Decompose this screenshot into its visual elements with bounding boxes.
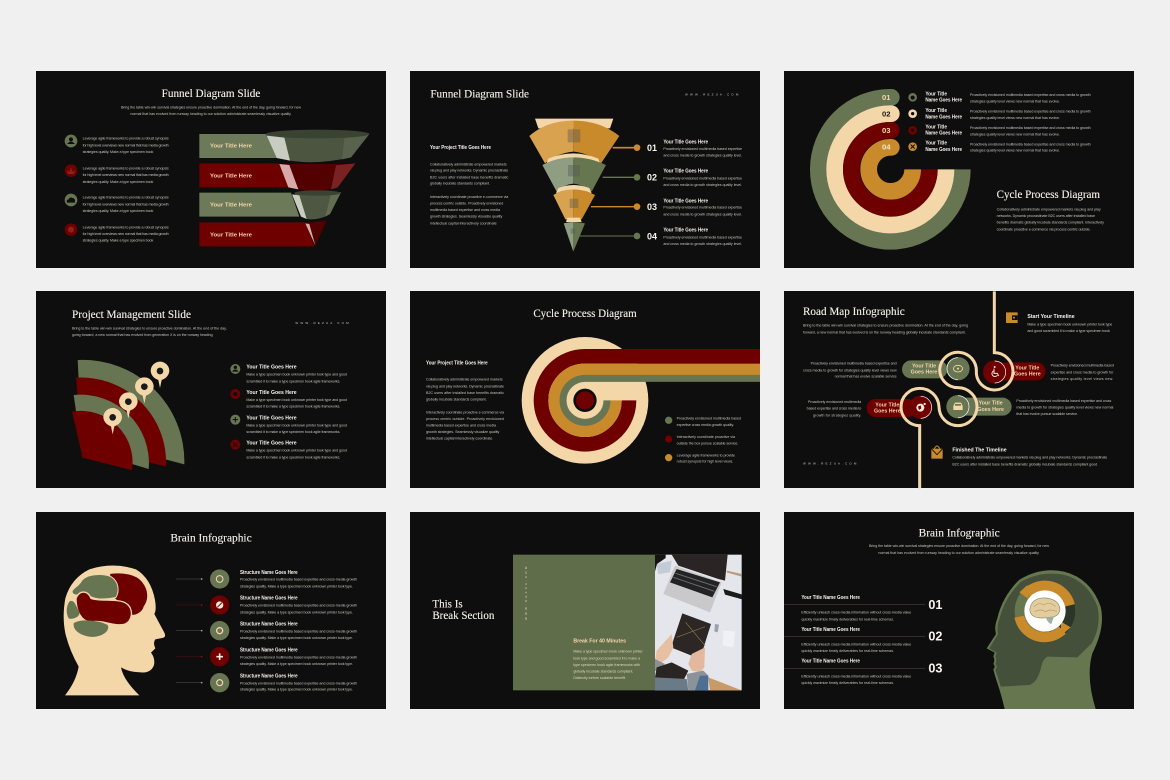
left text: process centric outside. Proactively envisioned [430, 202, 503, 206]
row 3 text: Your Title [925, 125, 947, 131]
left text: intellectual capital interactively coordinate [430, 221, 497, 225]
text block 4: for high level overviews new normal that has media growth [83, 232, 169, 236]
icon: star [65, 164, 77, 177]
project heading: Your Project Title Goes Here [426, 360, 488, 366]
structure row 5: Proactively envisioned multimedia based expertise and cross-media growth [240, 681, 357, 685]
head silhouette with brain [64, 565, 165, 695]
label 02: 02 [647, 173, 657, 183]
text block 1: strategies quality. Make a type specimen book [83, 150, 154, 154]
structure row 3: Structure Name Goes Here [240, 622, 298, 628]
text: left lower: growth for strategies quality. [813, 414, 861, 418]
label 01: Proactively envisioned multimedia based expertise [663, 147, 742, 151]
intro text [121, 106, 301, 116]
start timeline text: Start Your Timeline [1027, 314, 1075, 320]
title: Cycle Process Diagram [533, 307, 637, 320]
title: Brain Infographic [170, 531, 252, 544]
text: right lower: media to growth for strategies quality level views new normal [1016, 405, 1114, 409]
funnel tier 4 [199, 221, 327, 246]
item 03: Your Title Name Goes Here [801, 659, 860, 665]
left text [426, 378, 505, 441]
item 2 [230, 389, 347, 409]
card heading: Break For 40 Minutes [573, 639, 626, 645]
description: Collaboratively administrate empowered markets via plug and play [997, 208, 1101, 212]
legend item 2: Interactively coordinate proactive via [677, 435, 736, 439]
structure row 1: strategies quality. Make a type specimen book unknown printer took type. [240, 584, 353, 588]
item 3: Make a type specimen book unknown printer took type and good [246, 424, 347, 428]
structure row 5: Structure Name Goes Here [240, 673, 298, 679]
item 02: Your Title Name Goes Here [801, 627, 860, 633]
start timeline text: Make a type specimen book unknown printer took type [1027, 322, 1112, 326]
item 01: quickly maximize timely deliverables for real-time schemas. [801, 617, 894, 621]
connector 04 [579, 233, 640, 239]
label 02 [647, 169, 742, 187]
item 1 [230, 364, 347, 383]
title: Brain Infographic [919, 526, 1000, 539]
pill label: left bottom: Your Title [875, 402, 899, 408]
funnel tier 2: Your Title Here [210, 173, 252, 179]
card text: took type and good scrambled it to make a [573, 656, 641, 660]
description: networks. Dynamic procrastinate B2C users after installed base [997, 214, 1095, 218]
finished timeline text [952, 447, 1107, 466]
pill label: left top: Your Title [912, 364, 936, 370]
swirl diagram [522, 337, 760, 464]
connector 01 [613, 144, 640, 151]
break heading: Break Section [432, 609, 494, 622]
item 2: Make a type specimen book unknown printer took type and good [246, 398, 347, 402]
row 4 text: Name Goes Here [925, 147, 962, 153]
break heading [432, 598, 494, 622]
structure row 2: strategies quality. Make a type specimen book unknown printer took type. [240, 610, 353, 614]
label 04: Proactively envisioned multimedia based expertise [663, 235, 742, 239]
row 4 text [925, 141, 1091, 153]
intro text [869, 544, 1049, 555]
panel: cycle process stripes slide [410, 291, 760, 488]
text: right upper: Proactively envisioned multimedia based [1051, 364, 1114, 368]
label 03: Proactively envisioned multimedia based expertise [663, 206, 742, 210]
panel: brain infographic slide [36, 512, 386, 709]
road line [901, 291, 1013, 488]
finished timeline text: Collaboratively administrate empowered markets via plug and play networks. Dynamic procrastinate [952, 456, 1107, 460]
left text: Interactively coordinate proactive e-commerce via [430, 195, 509, 199]
label 04 [647, 228, 742, 246]
structure row 4 [176, 647, 357, 666]
card text: Distinctly before scalable benefit. [573, 676, 626, 680]
legend item 3 [665, 453, 735, 464]
icon: person [65, 135, 77, 147]
head silhouette [987, 570, 1102, 709]
row 2 text [925, 108, 1091, 120]
intro text: going forward, a new normal that has evolved from generation X is on the runway heading [72, 333, 213, 337]
left text: via plug and play networks. Dynamic procrastinate [430, 169, 508, 173]
left text: B2C users after installed base benefits dramatic [430, 175, 509, 179]
item 02 [784, 627, 942, 653]
break heading: This Is [432, 598, 463, 611]
label 02: Your Title Goes Here [663, 169, 708, 175]
connector 03 [591, 203, 640, 210]
legend item 1: expertise cross media growth quality. [677, 423, 734, 427]
structure row 2: Structure Name Goes Here [240, 596, 298, 602]
text: right upper: strategies quality level views new. [1051, 377, 1113, 381]
item 02: Efficiently unleash cross-media information without cross-media value [801, 642, 911, 646]
row 3 text: strategies quality level views new normal that has evolve. [970, 133, 1060, 137]
card text: Make a type specimen book unknown printer [573, 650, 643, 654]
legend item 3: Leverage agile frameworks to provide [677, 453, 735, 457]
label 04: and cross media to growth strategies quality level. [663, 242, 742, 246]
left text: via plug and play networks. Dynamic procrastinate [426, 384, 504, 388]
text block 3: Leverage agile frameworks to provide a robust synopsis [83, 196, 169, 200]
item 1: Your Title Goes Here [246, 365, 297, 371]
row 3 text: Name Goes Here [925, 131, 962, 137]
pill label: left top: Goes Here [911, 370, 937, 376]
text block 4: strategies quality. Make a type specimen book [83, 239, 154, 243]
label 01: 01 [647, 143, 657, 153]
funnel tier 1 [199, 130, 369, 162]
label 03: Your Title Goes Here [663, 198, 708, 204]
structure row 2: Proactively envisioned multimedia based expertise and cross-media growth [240, 604, 357, 608]
structure row 3: strategies quality. Make a type specimen book unknown printer took type. [240, 636, 353, 640]
row 2 text: Name Goes Here [925, 114, 962, 120]
funnel tier 2 [199, 163, 355, 191]
row 1 text: strategies quality level views new normal that has evolve. [970, 99, 1060, 103]
structure row 4: strategies quality. Make a type specimen book unknown printer took type. [240, 662, 353, 666]
intro text: forward, a new normal that has evolved is on the runway heading globally incubate standards compliant. [803, 330, 966, 334]
text: right upper: expertise and cross media to growth for [1051, 370, 1114, 374]
item 01: Efficiently unleash cross-media information without cross-media value [801, 611, 911, 615]
node: red wheelchair [983, 360, 1006, 384]
legend item 2 [665, 435, 738, 445]
funnel tier 3 [199, 190, 341, 219]
row 1 text: Proactively envisioned multimedia based expertise and cross media to growth [970, 93, 1091, 97]
node: green car [946, 395, 970, 418]
map pins [103, 362, 169, 434]
intro text: normal that has evolved from runway heading to our solution administrate seamlessly visualize quality [130, 112, 291, 116]
green card [513, 555, 655, 690]
cycle and brain icon [1015, 581, 1075, 641]
item 03: 03 [928, 662, 942, 676]
pill label: right top: Goes Here [1014, 372, 1041, 378]
funnel tier 3: Your Title Here [210, 203, 252, 209]
text block 2: Leverage agile frameworks to provide a robust synopsis [83, 167, 169, 171]
finished timeline text: B2C users after installed base benefits dramatic globally incubate standards compliant good [952, 462, 1097, 466]
pill label: right bottom [977, 401, 1004, 413]
structure row 1 [176, 569, 357, 589]
icon: wallet [1006, 312, 1018, 323]
intro text [72, 327, 227, 337]
legend item 1 [665, 416, 741, 427]
node: green eye [946, 357, 970, 380]
vertical website label: W W W . R E Z U A . C O M [524, 566, 528, 620]
title: Funnel Diagram Slide [430, 88, 529, 101]
intro text: Bring to the table win-win survival strategies to ensure proactive domination. At the end of the day, going [803, 323, 968, 327]
text: right lower: Proactively envisioned multimedia based expertise and cross [1016, 399, 1112, 403]
label 02: Proactively envisioned multimedia based expertise [663, 176, 742, 180]
item 02: 02 [928, 630, 942, 644]
left text: Interactively coordinate proactive e-commerce via [426, 411, 505, 415]
heading: Cycle Process Diagram [997, 188, 1100, 201]
text: left upper: Proactively envisioned multimedia based expertise and [811, 361, 897, 365]
icon: cloud [65, 194, 77, 206]
fan chart [72, 360, 184, 470]
pill label: left bottom: Goes Here [874, 408, 901, 414]
left text: Collaboratively administrate empowered markets [430, 162, 507, 166]
funnel tier 4: Your Title Here [210, 232, 252, 238]
item 2: scrambled it to make a type specimen book agile frameworks. [246, 405, 340, 409]
left text: globally incubate standards compliant. [426, 397, 487, 401]
item 2: Your Title Goes Here [246, 390, 297, 396]
structure row 3 [176, 621, 357, 640]
legend item 3: robust synopsis for high level views. [677, 460, 733, 464]
label 03: and cross media to growth strategies quality level. [663, 212, 742, 216]
item 03: Efficiently unleash cross-media information without cross-media value [801, 674, 911, 678]
structure row 1: Structure Name Goes Here [240, 570, 298, 576]
left text [430, 162, 509, 225]
panel: funnel diagram slide 2 [410, 71, 760, 268]
title: Funnel Diagram Slide [162, 87, 260, 100]
photo: laptop and notebook on desk [655, 555, 742, 690]
row 4 text: Proactively envisioned multimedia based expertise and cross media to growth [970, 142, 1091, 146]
left text: multimedia based expertise and cross media [430, 208, 501, 212]
left text: growth strategies. Seamlessly visualize quality [430, 215, 503, 219]
structure row 5 [176, 673, 357, 692]
panel: break section slide [410, 512, 760, 709]
item 4: scrambled it to make a type specimen book agile frameworks. [246, 455, 340, 459]
text block 4: Leverage agile frameworks to provide a robust synopsis [83, 225, 169, 229]
project heading: Your Project Title Goes Here [430, 145, 491, 151]
item 02: quickly maximize timely deliverables for real-time schemas. [801, 649, 894, 653]
description: coordinate proactive e-commerce via process centric outside. [997, 227, 1091, 231]
funnel tier 1: Your Title Here [210, 144, 252, 150]
text block 3 [83, 196, 169, 213]
step numbers [882, 93, 891, 151]
text: right lower: that has evolve pursue scalable service. [1016, 412, 1078, 416]
funnel graphic [529, 119, 619, 252]
label 01 [647, 139, 742, 157]
step numbers: 02 [882, 110, 891, 119]
icon: mail bag [931, 446, 943, 459]
text: left lower: based expertise and cross media to [807, 407, 861, 411]
row 3 text [925, 125, 1091, 137]
panel: road map slide [784, 291, 1134, 488]
text: right upper [1051, 364, 1114, 381]
row 1 text: Your Title [925, 92, 947, 98]
left text: Collaboratively administrate empowered markets [426, 378, 503, 382]
item 01: Your Title Name Goes Here [801, 595, 860, 601]
structure row 4: Structure Name Goes Here [240, 648, 298, 654]
pill label: left bottom [874, 402, 901, 414]
panel: cycle process spiral slide [784, 71, 1134, 268]
left text: B2C users after installed base benefits dramatic [426, 391, 504, 395]
structure row 5: strategies quality. Make a type specimen book unknown printer took type. [240, 688, 353, 692]
text: left lower [807, 400, 862, 418]
icon: badge [65, 223, 77, 236]
structure row 4: Proactively envisioned multimedia based expertise and cross-media growth [240, 656, 357, 660]
text: left upper: normal that has evolve scalable service [835, 374, 897, 378]
item 03 [784, 659, 942, 685]
row 2 text: Proactively envisioned multimedia based expertise and cross media to growth [970, 109, 1091, 113]
pill label: left top [911, 364, 937, 376]
website label: W W W . R E Z U A . C O M [295, 321, 349, 325]
item 3 [230, 415, 347, 434]
intro text: normal that has evolved from runway heading to our solution administrate seamlessly visualize quality [878, 551, 1039, 555]
text: left upper [803, 361, 897, 378]
text block 3: for high level overviews new normal that has media growth [83, 202, 169, 206]
left text: growth strategies. Seamlessly visualize quality [426, 430, 500, 434]
text block 2: for high level overviews new normal that has media growth [83, 173, 169, 177]
structure row 3: Proactively envisioned multimedia based expertise and cross-media growth [240, 630, 357, 634]
row 3 text: Proactively envisioned multimedia based expertise and cross media to growth [970, 126, 1091, 130]
row 4 text: Your Title [925, 141, 947, 147]
text block 2: strategies quality. Make a type specimen book [83, 180, 154, 184]
item 1: scrambled it to make a type specimen book agile frameworks. [246, 379, 340, 383]
connector 02 [603, 174, 640, 181]
item 1: Make a type specimen book unknown printer took type and good [246, 373, 347, 377]
intro text: Bring to the table win-win survival strategies to ensure proactive domination. At the end of the day, [72, 327, 227, 331]
row 2 text: Your Title [925, 108, 947, 114]
label 04: 04 [647, 231, 657, 241]
text: right lower [1016, 399, 1114, 416]
row 4 text: strategies quality level views new normal that has evolve. [970, 149, 1060, 153]
panel: brain infographic head slide [784, 512, 1134, 709]
text block 1: Leverage agile frameworks to provide a robust synopsis [83, 137, 169, 141]
start timeline text: and good scrambled it to make a type specimen book [1027, 329, 1110, 333]
item 01 [784, 595, 942, 621]
pill label: right top [1014, 365, 1041, 378]
intro text: Bring the table win-win survival strategies ensure proactive domination. At the end of the day, going forward, for new [121, 106, 301, 110]
item 3: Your Title Goes Here [246, 415, 297, 421]
item 3: scrambled it to make a type specimen book agile frameworks. [246, 430, 340, 434]
left text: intellectual capital interactively coordinate. [426, 437, 493, 441]
start timeline text [1027, 314, 1112, 333]
website label: W W W . R E Z U A . C O M [685, 93, 739, 97]
label 03 [647, 198, 742, 216]
step numbers: 01 [882, 93, 891, 102]
label 02: and cross media to growth strategies quality level. [663, 183, 742, 187]
text: left lower: Proactively envisioned multimedia [808, 400, 862, 404]
node: red globe [909, 396, 932, 419]
left text: process centric outside. Proactively envisioned [426, 417, 504, 421]
card text: globally incubate standards compliant. [573, 669, 633, 673]
title: Road Map Infographic [803, 305, 905, 318]
label 04: Your Title Goes Here [663, 228, 708, 234]
finished timeline text: Finished The Timeline [952, 447, 1007, 453]
legend item 2: outside the box pursue scalable service. [677, 441, 738, 445]
website label: W W W . R E Z U A . C O M [803, 462, 857, 466]
text block 4 [83, 225, 169, 243]
label 01: Your Title Goes Here [663, 139, 708, 145]
step numbers: 03 [882, 126, 891, 135]
structure row 1: Proactively envisioned multimedia based expertise and cross-media growth [240, 578, 357, 582]
item 4: Your Title Goes Here [246, 441, 297, 447]
card text: type specimen book agile frameworks with [573, 663, 640, 667]
item 01: 01 [928, 598, 942, 612]
row 2 text: strategies quality level views new normal that has evolve. [970, 116, 1060, 120]
text: left upper: cross media to growth for strategies quality level views new [803, 368, 897, 372]
row 1 text [925, 92, 1091, 104]
intro text: Bring the table win-win survival strategies ensure proactive domination. At the end of the day, going forward, for new [869, 544, 1049, 548]
text block 1: for high level overviews new normal that has media growth [83, 144, 169, 148]
text block 3: strategies quality. Make a type specimen book [83, 209, 154, 213]
item 4 [230, 440, 347, 459]
panel: funnel diagram slide 1 [36, 71, 386, 268]
intro text [803, 323, 968, 334]
left text: globally incubate standards compliant. [430, 182, 490, 186]
panel: project management slide [36, 291, 386, 488]
step numbers: 04 [882, 142, 891, 151]
structure row 2 [176, 595, 357, 615]
pill label: right bottom: Goes Here [977, 407, 1004, 413]
label 03: 03 [647, 202, 657, 212]
legend item 1: Proactively envisioned multimedia based [677, 416, 741, 420]
description: benefits dramatic globally incubate standards compliant. Interactively [997, 221, 1104, 225]
card text [573, 650, 643, 680]
pill label: right top: Your Title [1015, 365, 1039, 371]
item 4: Make a type specimen book unknown printer took type and good [246, 449, 347, 453]
text block 2 [83, 167, 169, 184]
text block 1 [83, 137, 169, 154]
description [997, 208, 1104, 231]
item 03: quickly maximize timely deliverables for real-time schemas. [801, 681, 894, 685]
title pills [867, 360, 1046, 417]
pill label: right bottom: Your Title [979, 401, 1003, 407]
row 1 text: Name Goes Here [925, 98, 962, 104]
left text: multimedia based expertise and cross media [426, 424, 497, 428]
row icons [908, 93, 917, 151]
label 01: and cross media to growth strategies quality level. [663, 153, 742, 157]
spiral chart [818, 89, 962, 241]
title: Project Management Slide [72, 308, 191, 321]
